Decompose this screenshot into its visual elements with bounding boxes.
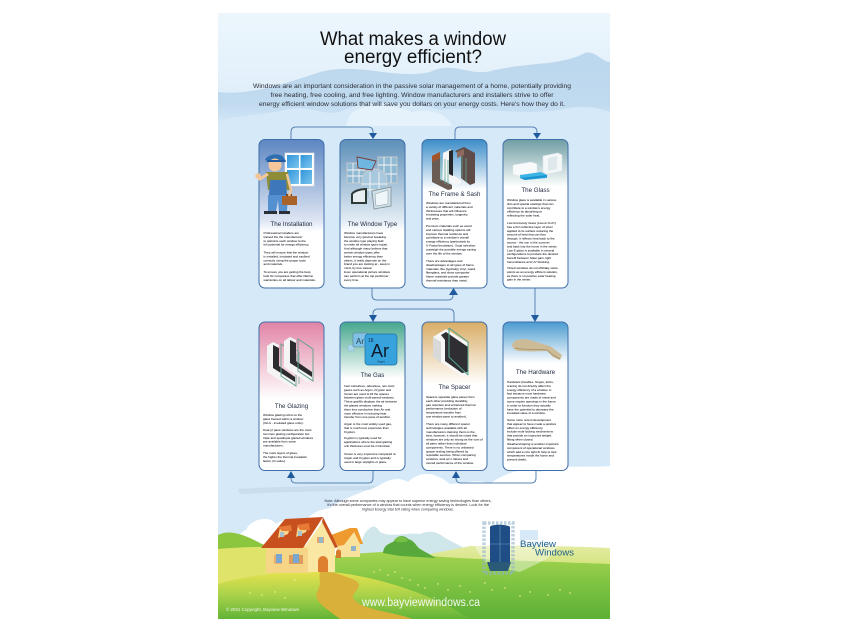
body text: Xenon is very expensive compared to [344,452,396,456]
body text: better energy efficiency than [344,254,383,258]
body text: and materials. [264,262,283,266]
panel: The Window Type [340,140,405,288]
body text: energy efficiency of a window, in [507,388,552,392]
panel: The Glazing [259,322,324,470]
body text [426,395,483,465]
body text: Xenon are used to fill the spaces [344,392,389,396]
body text: performance (reduction of [426,407,462,411]
body text: Argon is the most widely used gas, [344,422,392,426]
body text: Windows are manufactured from [426,201,471,205]
body text: them less conductive than Air and [344,407,391,411]
body text: windows, look at U-Values and [426,457,468,461]
body text: These gasfills displace the air between [344,400,397,404]
body text: are available from some [263,440,296,444]
footnote: Note: Although some companies may appear to have superior energy saving technologies than others, [324,499,492,503]
title: energy efficient? [344,47,482,68]
body text: which add a nice tight fit help to lock [507,450,557,454]
body text: a variety of different materials and [426,205,473,209]
body text: transfer from one pane of another. [344,415,391,419]
body text: Hardware (handles, hinges, locks, [507,380,554,384]
body text: others, it really depends on the [344,258,387,262]
heading: The Gas [361,372,384,379]
body text: and various cladding options will [426,228,471,232]
body text: gas retention and enhanced thermal [426,403,476,407]
website url: www.bayviewwindows.ca [361,597,481,609]
body text: Argon and Krypton and is typically [344,456,391,460]
body text [264,231,316,282]
body text: And although many believe that [344,247,387,251]
body text: component of operational windows [507,446,555,450]
body text [426,201,476,282]
heading: The Hardware [516,369,556,376]
body text: fiberglass, and show composite- [426,271,470,275]
logo: Bayview Windows: Windows [535,548,575,558]
body text: gain in the winter. [507,278,531,282]
logo: Bayview Windows: Bayview [520,539,557,549]
body text: (IGUs - insulated glass units). [263,421,304,425]
body text: frame materials provide greater [426,275,469,279]
body text: insulating properties, longevity [426,213,468,217]
body text: trained the the manufacturer [264,235,302,239]
body text: thermal resistance than metal. [426,278,468,282]
body text: applications where the total glazing [344,440,392,444]
logo: Bayview Windows [472,520,575,573]
sky background [218,13,610,619]
body text: tints and special coatings that can [507,202,554,206]
body text: Inert colourless, odourless, non-toxic [344,384,395,388]
body text: unit thickness must be minimized. [344,444,390,448]
body text: Tinted windows do not officially score [507,266,558,270]
body text: have the potential to decrease the [507,407,554,411]
body text: insulated value of a window. [507,411,546,415]
body text: common glazing configuration but [263,432,309,436]
body text: efficiency by absorbing or [507,210,542,214]
body text: in order to function they actually [507,403,551,407]
panel: The Frame & Sash [422,140,487,288]
body text: the higher the thermal insulation [263,455,307,459]
copyright: © 2021 Copyright, Bayview Windows [226,606,300,612]
body text: prevent drafts. [507,458,527,462]
body text: the window type playing field [344,239,384,243]
body text: become very good at tweaking [344,235,386,239]
body text: triple and quadruple glazed windows [263,436,314,440]
intro text: energy efficient window solutions that will save you dollars on your energy costs. Here's how they do it. [259,102,565,108]
body text: configurations to produce the desired [507,252,558,256]
body text: materials, like (typically) vinyl, wood, [426,267,476,271]
footnote: highest Energy Star ER rating when comparing windows. [362,508,454,512]
body text: cranks) do not directly affect the [507,384,551,388]
body text: Premium materials such as wood [426,224,472,228]
body text: applied to its surface reducing the [507,229,554,233]
body text: outweigh the possible energy saving [426,247,476,251]
icon: window handle [512,339,562,360]
back house [331,528,363,558]
body text: Weatherstripping is another important [507,442,559,446]
body text: gases such as Argon, Krypton and [344,388,391,392]
body text: benefit between Solar gain, light [507,256,551,260]
body text: is installed, insulated and caulked [264,254,310,258]
body text: Krypton. [344,430,356,434]
body text: through. It reflects heat back to the [507,237,555,241]
body text: certain window types offer [344,250,380,254]
white clouds and landscape [218,466,610,619]
body text: over the life of the window. [426,251,463,255]
intro text [253,84,571,108]
body text: Some more recent development [507,418,551,422]
icon: argon tiles: Ar [371,341,389,361]
body text: that provide an improved airtight [507,434,551,438]
body text: U-Factor/insulation). Good selection [426,244,476,248]
body text: The more layers of glass, [263,451,298,455]
body text: transmittance and UV blocking. [507,260,550,264]
body text: disadvantages to all types of frame [426,263,474,267]
panel: The Gas [340,322,405,470]
front house [261,517,338,573]
body text: more effective in reducing heat [344,411,386,415]
bush [383,536,436,558]
body text: each other providing durability, [426,399,468,403]
body text: Even operational picture windows [344,270,391,274]
body text: correctly using the proper tools [264,258,306,262]
heading: The Frame & Sash [429,191,481,198]
body text [344,384,397,464]
icon: argon tiles: Argon [376,360,385,364]
body text: that appear to have made a positive [507,422,556,426]
panel: The Spacer [422,322,487,470]
icon: spacer cross-section [433,328,468,376]
body text: every time. [344,278,359,282]
body text: Window manufacturers have [344,231,383,235]
body text: windows are only as strong as the sum of [426,438,483,442]
body text: warranties on all labour and materials. [264,278,316,282]
body text: source - the sun in the summer [507,240,550,244]
title [320,29,506,68]
wildflower dots [249,569,571,599]
body text: To ensure you are getting the best, [264,270,311,274]
body text: overall performance of the window. [426,461,474,465]
body text: temperatures inside the home and [507,454,554,458]
body text: Krypton is typically used for [344,436,382,440]
body text: brand you are looking at - keep in [344,262,390,266]
icon: argon tiles: 18 [368,338,374,344]
body text: Dual (2 pane windows are the most [263,428,312,432]
body text: components are made of metal and [507,396,556,400]
body text: manufacturers. [263,444,284,448]
icon: window types [347,157,397,209]
heading: The Glazing [275,403,309,410]
body text: components. There is no unbiased [426,445,474,449]
body text: full potential for energy efficiency. [264,243,309,247]
body text: Window glazing refers to the [263,413,302,417]
body text: reflecting the solar heat. [507,214,540,218]
body text: include multi-locking mechanisms [507,430,554,434]
icon: glazing units [267,337,313,387]
body text: look for companies that offer lifetime [264,274,313,278]
body text: and price. [426,217,440,221]
body text: as there is no positive solar heating [507,274,556,278]
body text: best, however, it should be noted that [426,434,477,438]
body text: There are many different spacer [426,422,470,426]
body text [507,198,558,282]
body text: glass framed within a window [263,417,304,421]
body text: Low-E glass is available in several [507,248,554,252]
intro text: free heating, free cooling, and free lighting. Window manufacturers and installers strive to offer [270,93,554,99]
icon: glass samples [513,153,562,180]
body text: fitting when closed. [507,438,533,442]
body text: to optimize each window to the [264,239,306,243]
body text: spacer testing being offered by [426,449,469,453]
body text: reputable sources. When comparing [426,453,476,457]
panel: The Hardware [503,322,568,470]
body text: some require openings in the frame [507,400,556,404]
body text: one window pane to another). [426,414,467,418]
body text: and back into the home in the winter. [507,244,558,248]
footnote [324,499,492,512]
heading: The Installation [271,221,313,228]
body text: used in large skylights or glass. [344,460,387,464]
body text: energy efficiency (particularly its [426,240,470,244]
body text: contribute to a window's overall [426,236,469,240]
body text: improve thermal resilience and [426,232,468,236]
body text: the glazed windows making [344,404,382,408]
body text: contribute to a window's energy [507,206,551,210]
icon: argon tiles [348,333,397,365]
icon: frame profiles [432,147,475,190]
heading: The Spacer [438,384,470,391]
body text: manufacturers claiming theirs is the [426,430,475,434]
body text: to make all window types equal. [344,243,388,247]
body text: between glass multi-paned windows. [344,396,395,400]
body text: thicknesses that will influence [426,209,467,213]
panel: The Glass [503,140,568,288]
footnote: it's the overall performance of a window that counts when energy efficiency is desired. Look for the [327,503,489,507]
icon: argon tiles: Ar [356,337,364,346]
body text: technologies available with all [426,426,467,430]
body text: There are advantages and [426,259,463,263]
body text: points as an energy efficient solution, [507,270,558,274]
panel: The Installation [255,140,324,288]
body text: all parts rather than individual [426,442,467,446]
body text: Professional installers are [264,231,299,235]
body text: that is much less expensive than [344,426,389,430]
body text: Window glass is available in various [507,198,557,202]
body text: affect on energy efficiency [507,426,543,430]
body text: mind, by true casual [344,266,372,270]
body text: can perform at the top performer [344,274,389,278]
body text: has a thin reflective layer of silver [507,225,553,229]
body text: temperature transfer from [426,411,461,415]
body text: fact because most hardware [507,392,546,396]
heading: The Glass [521,187,550,194]
body text [263,413,314,463]
body text [507,380,559,462]
title: What makes a window [320,29,506,50]
body text: amount of heat that can flow [507,233,547,237]
flow arrows [287,127,541,483]
heading: The Window Type [348,221,398,228]
body text: Spacers separate glass panes from [426,395,475,399]
body text: Low Emissivity Glass (Low-E FLAT) [507,221,556,225]
body text: They will ensure that the window [264,250,309,254]
intro text: Windows are an important consideration in the passive solar management of a home, potentially providing [253,84,571,90]
icon: installer with window [255,153,314,214]
body text: factor, (R-value). [263,459,286,463]
